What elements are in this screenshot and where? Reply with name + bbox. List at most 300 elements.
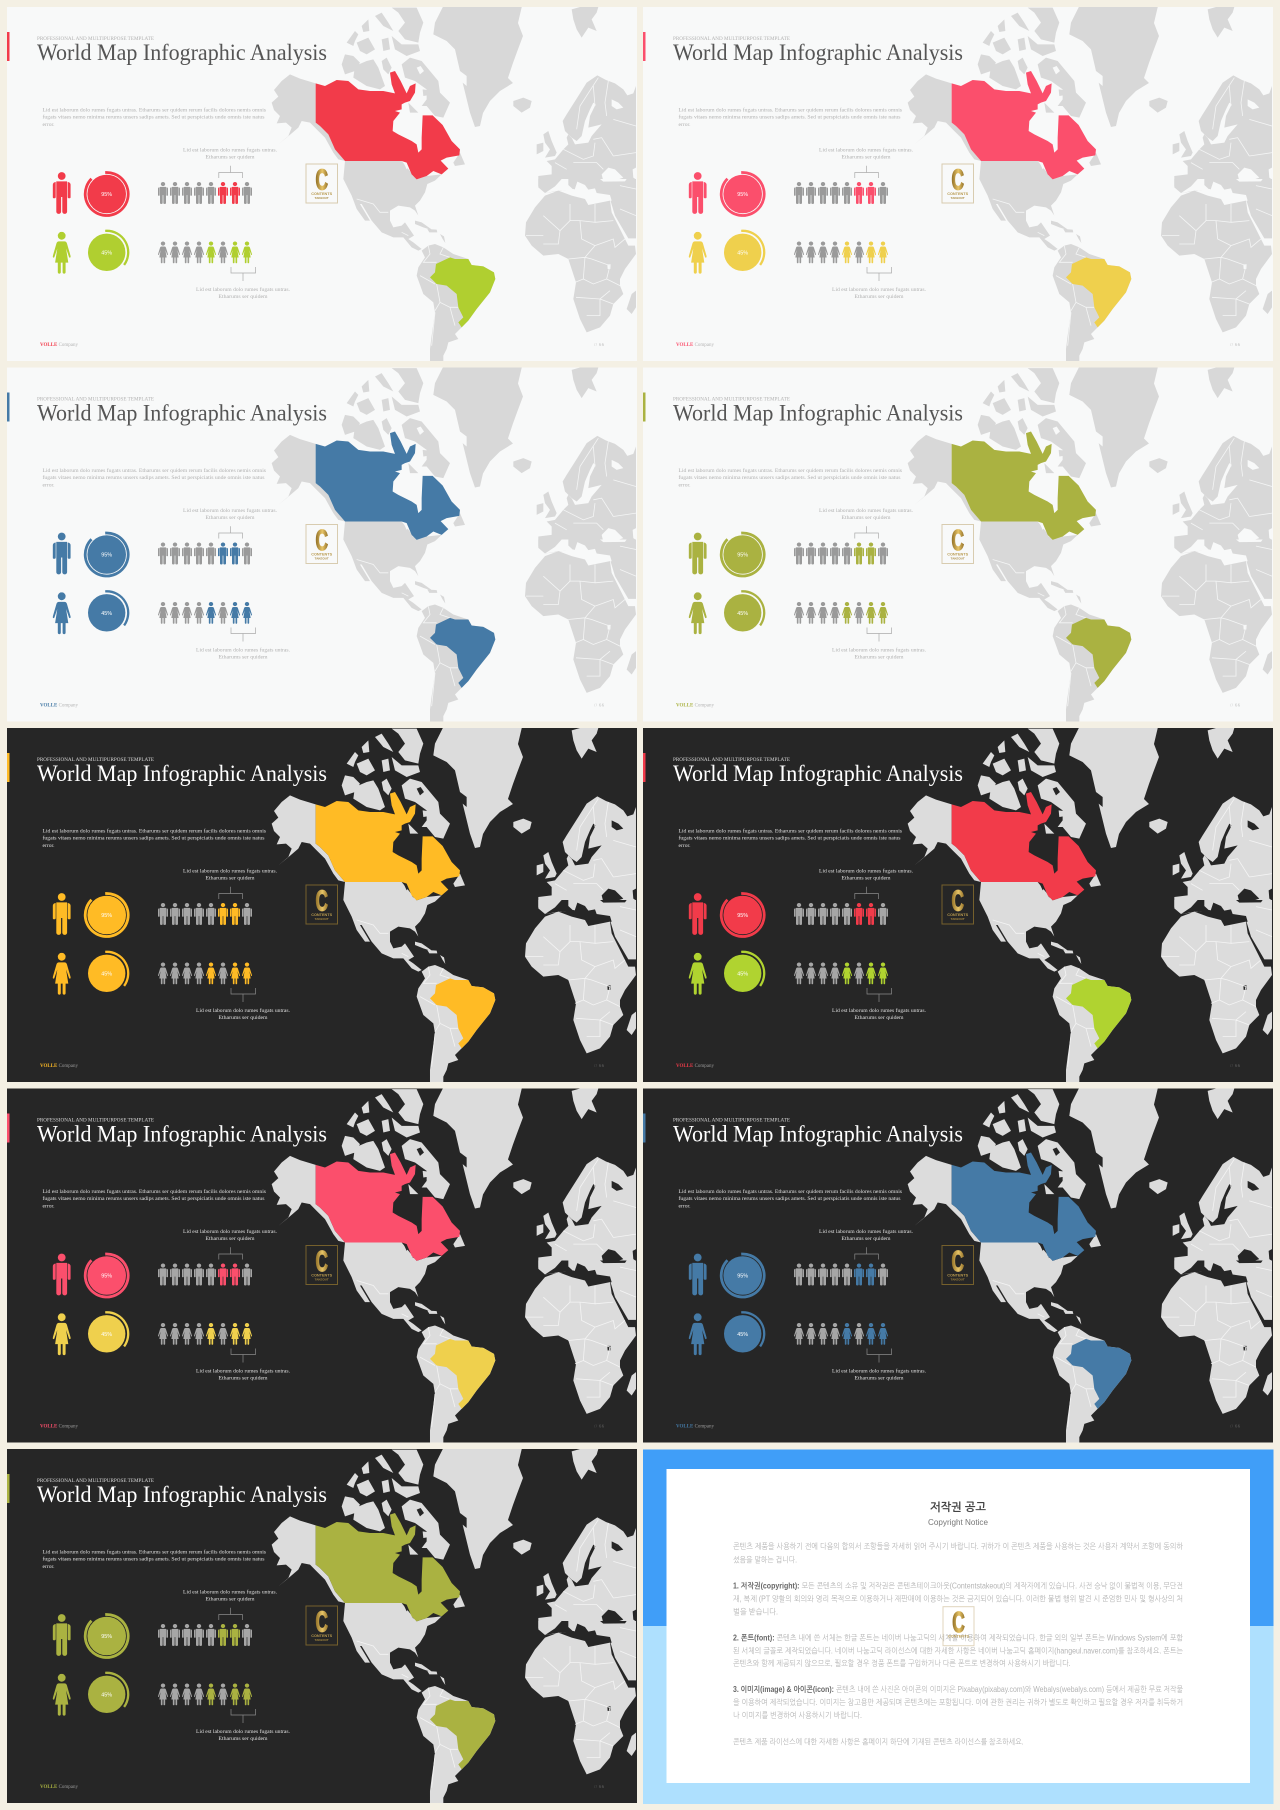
top callout text: Lid est laborum dolo rumes fugats untras. <box>819 509 913 514</box>
section 3: image and icon: 3. 이미지(image) & 아이콘(icon): 콘텐츠 내에 쓴 사진은 아이콘의 이미지은 Pixabay(pixabay.com)와 Webalys(webalys.com) 등에서 제공한 무료 저작물 <box>733 1685 1183 1694</box>
logo badge: CONTENTS <box>311 912 333 917</box>
title: World Map Infographic Analysis <box>673 400 963 426</box>
intro text: fugats vitaes nemo minima rerums unsers sadips amets. Sed ut perspiciatis unde omnis iste natus <box>42 837 265 842</box>
intro text: Lid est laborum dolo rumes fugats untras. Etharums ser quidem rerum facilis dolores nemis omnis <box>42 108 266 114</box>
intro paragraph: 셨음을 말하는 겁니다. <box>733 1556 797 1564</box>
footer brand: VOLLE Company <box>40 702 78 708</box>
male pictogram row <box>158 1264 252 1285</box>
panel: copyright notice <box>643 1450 1274 1804</box>
top callout text <box>183 870 277 882</box>
logo badge: CONTENTS <box>947 1272 969 1278</box>
copyright subheading: Copyright Notice <box>928 1518 989 1527</box>
icon: male figure <box>53 1254 71 1295</box>
section 2: font: 된 서체의 글꼴로 제작되었습니다. 네이버 나눔고딕 라이선스에 대한 자세한 사항은 네이버 나눔고딕 홈페이지(hangeul.naver.com)를 참조하세요. 폰트는 <box>733 1646 1183 1656</box>
logo badge: C <box>315 165 328 197</box>
icon: female figure <box>53 1674 71 1716</box>
eyebrow heading: PROFESSIONAL AND MULTIPURPOSE TEMPLATE <box>37 1479 154 1484</box>
donut: 45%: 45% <box>101 1332 112 1338</box>
intro paragraph <box>733 1542 1183 1564</box>
logo badge <box>942 1246 974 1284</box>
top bracket <box>219 887 242 899</box>
icon: female figure <box>689 953 707 995</box>
logo badge: TAKEOUT <box>315 917 329 921</box>
logo badge: C <box>951 1246 964 1278</box>
bottom callout text: Lid est laborum dolo rumes fugats untras. <box>196 1730 290 1735</box>
logo badge: TAKEOUT <box>951 557 965 561</box>
eyebrow heading: PROFESSIONAL AND MULTIPURPOSE TEMPLATE <box>37 1118 154 1124</box>
section 1: copyright: 벌을 받습니다. <box>733 1608 778 1616</box>
title: World Map Infographic Analysis <box>37 400 327 426</box>
intro text: fugats vitaes nemo minima rerums unsers sadips amets. Sed ut perspiciatis unde omnis iste natus <box>42 1558 265 1563</box>
intro text: error. <box>42 123 54 128</box>
logo badge: C <box>952 1607 965 1639</box>
donut: 95%: 95% <box>101 913 112 919</box>
donut: 95%: 95% <box>101 1634 112 1640</box>
intro text: error. <box>42 844 54 849</box>
female pictogram row <box>158 602 252 624</box>
bottom bracket <box>867 988 892 1002</box>
intro text: fugats vitaes nemo minima rerums unsers sadips amets. Sed ut perspiciatis unde omnis iste natus <box>678 116 901 121</box>
intro text: error. <box>678 1204 690 1209</box>
accent bar <box>643 1114 646 1142</box>
section 3: image and icon: 을 이용하여 제작되었습니다. 이미지는 참고용만 제공되며 콘텐츠에는 포함됩니다. 이에 관한 권리는 귀하가 별도로 확인하고 필요할 경우 저자를 취득하거 <box>733 1698 1183 1707</box>
top callout text: Lid est laborum dolo rumes fugats untras. <box>183 1230 277 1235</box>
world map with Canada and Brazil highlighted <box>272 1088 636 1444</box>
logo badge: CONTENTS <box>311 1633 333 1638</box>
top callout text: Lid est laborum dolo rumes fugats untras. <box>183 509 277 514</box>
donut: 95% <box>721 1254 764 1297</box>
world map with Canada and Brazil highlighted <box>908 366 1272 723</box>
top callout text: Etharums ser quidem <box>206 156 255 161</box>
donut: 45% <box>88 1312 128 1352</box>
logo badge: C <box>951 165 964 197</box>
eyebrow heading: PROFESSIONAL AND MULTIPURPOSE TEMPLATE <box>37 758 154 763</box>
logo badge: C <box>315 886 328 918</box>
icon: male figure <box>689 1254 707 1295</box>
bottom bracket <box>231 1709 256 1723</box>
donut: 95% <box>721 172 764 215</box>
donut: 95% <box>85 893 128 936</box>
top bracket <box>219 1608 242 1620</box>
intro text: fugats vitaes nemo minima rerums unsers sadips amets. Sed ut perspiciatis unde omnis iste natus <box>42 476 265 481</box>
bottom bracket <box>231 628 256 642</box>
accent bar <box>7 392 10 422</box>
logo badge <box>306 1606 338 1645</box>
logo badge: CONTENTS <box>947 191 969 196</box>
section 2: font: 2. 폰트(font): 콘텐츠 내에 쓴 서체는 한글 폰트는 네이버 나눔고딕의 서체를 이용하여 제작되었습니다. 한글 외의 일부 폰트는 Windows System에 포함 <box>733 1634 1183 1642</box>
page number: // 66 <box>594 1784 605 1789</box>
bottom callout text: Lid est laborum dolo rumes fugats untras. <box>832 1009 926 1014</box>
top callout text: Lid est laborum dolo rumes fugats untras. <box>819 148 913 154</box>
world map with Canada and Brazil highlighted <box>272 366 636 723</box>
top callout text <box>819 509 913 521</box>
bottom callout text <box>196 288 290 300</box>
male pictogram row <box>794 543 888 564</box>
bottom callout text <box>196 1009 290 1021</box>
eyebrow heading: PROFESSIONAL AND MULTIPURPOSE TEMPLATE <box>37 398 154 402</box>
logo badge <box>943 1607 974 1646</box>
top bracket <box>855 166 878 178</box>
bottom callout text <box>832 288 926 300</box>
logo badge <box>942 885 974 924</box>
icon: male figure <box>689 172 707 214</box>
bottom callout text <box>196 1730 290 1742</box>
intro text: Lid est laborum dolo rumes fugats untras. Etharums ser quidem rerum facilis dolores nemis omnis <box>42 469 266 474</box>
intro text: fugats vitaes nemo minima rerums unsers sadips amets. Sed ut perspiciatis unde omnis iste natus <box>42 116 265 121</box>
male pictogram row <box>794 903 888 925</box>
intro text: Lid est laborum dolo rumes fugats untras. Etharums ser quidem rerum facilis dolores nemis omnis <box>678 469 902 474</box>
section 3: image and icon: 나 이미지를 변경하여 사용하시기 바랍니다. <box>733 1711 862 1720</box>
donut: 45% <box>724 1312 764 1352</box>
donut: 95% <box>85 1614 128 1657</box>
male pictogram row <box>158 903 252 925</box>
female pictogram row <box>158 963 252 984</box>
bottom callout text: Lid est laborum dolo rumes fugats untras. <box>196 288 290 293</box>
bottom callout text <box>832 649 926 661</box>
top callout text <box>819 1230 913 1242</box>
donut: 95%: 95% <box>101 1274 112 1280</box>
bottom callout text: Etharums ser quidem <box>854 656 904 661</box>
panel: light slide, olive <box>643 366 1273 723</box>
title: World Map Infographic Analysis <box>37 761 327 786</box>
female pictogram row <box>158 1323 252 1345</box>
female pictogram row <box>158 1684 252 1705</box>
bottom callout text: Etharums ser quidem <box>218 295 268 300</box>
top callout text: Lid est laborum dolo rumes fugats untras. <box>819 1230 913 1235</box>
intro text <box>42 469 266 488</box>
top callout text: Lid est laborum dolo rumes fugats untras. <box>183 870 277 874</box>
donut: 95% <box>85 1254 128 1297</box>
page number: // 66 <box>1230 1063 1241 1068</box>
bottom bracket <box>231 267 256 281</box>
top bracket <box>219 526 242 538</box>
bottom callout text: Lid est laborum dolo rumes fugats untras. <box>196 1370 290 1375</box>
top bracket <box>855 887 878 899</box>
logo badge <box>306 164 338 203</box>
page number: // 66 <box>594 342 605 347</box>
icon: male figure <box>689 893 707 935</box>
icon: female figure <box>689 232 707 274</box>
donut: 45%: 45% <box>737 611 748 617</box>
icon: male figure <box>53 172 71 214</box>
top callout text: Etharums ser quidem <box>842 1237 891 1242</box>
bottom callout text: Lid est laborum dolo rumes fugats untras. <box>196 649 290 654</box>
bottom callout text: Etharums ser quidem <box>854 1377 904 1382</box>
title: World Map Infographic Analysis <box>673 761 963 786</box>
eyebrow heading: PROFESSIONAL AND MULTIPURPOSE TEMPLATE <box>673 758 790 763</box>
female pictogram row <box>794 602 888 624</box>
section 1: copyright: 1. 저작권(copyright): 모든 콘텐츠의 소유 및 저작권은 콘텐츠테이크아웃(Contentstakeout)의 제작자에게 있습니다. 사전 승낙 없이 불법적 이용, 무단전 <box>733 1582 1183 1590</box>
section 3: image and icon <box>733 1685 1183 1720</box>
world map with Canada and Brazil highlighted <box>272 727 636 1083</box>
top callout text: Etharums ser quidem <box>842 516 891 521</box>
icon: male figure <box>53 1614 71 1656</box>
top bracket <box>219 166 242 178</box>
top callout text <box>183 1230 277 1242</box>
accent bar <box>643 753 646 782</box>
donut: 45%: 45% <box>737 1332 748 1338</box>
top callout text: Etharums ser quidem <box>206 516 255 521</box>
logo badge: TAKEOUT <box>951 1278 965 1282</box>
top callout text <box>819 870 913 882</box>
top callout text: Etharums ser quidem <box>206 877 255 882</box>
footer brand: VOLLE Company <box>676 702 714 708</box>
accent bar <box>643 392 646 422</box>
panel: dark slide, amber <box>7 727 637 1083</box>
footer brand: VOLLE Company <box>40 342 78 348</box>
donut: 95%: 95% <box>101 552 112 558</box>
bottom callout text <box>196 649 290 661</box>
logo badge: TAKEOUT <box>315 196 329 200</box>
donut: 45% <box>88 591 128 632</box>
title: World Map Infographic Analysis <box>37 1122 327 1146</box>
donut: 95% <box>85 172 128 215</box>
logo badge: C <box>951 525 964 557</box>
icon: male figure <box>689 533 707 574</box>
accent bar <box>7 1474 10 1503</box>
logo badge <box>306 885 338 924</box>
icon: female figure <box>53 592 71 634</box>
intro text <box>678 469 902 488</box>
top bracket <box>219 1247 242 1260</box>
female pictogram row <box>794 242 888 263</box>
logo badge: C <box>315 1246 328 1278</box>
intro text: Lid est laborum dolo rumes fugats untras. Etharums ser quidem rerum facilis dolores nemis omnis <box>42 830 266 834</box>
accent bar <box>7 753 10 782</box>
title: World Map Infographic Analysis <box>37 40 327 65</box>
donut: 95%: 95% <box>737 192 748 198</box>
bottom bracket <box>231 988 256 1002</box>
panel: dark slide, blue <box>643 1088 1273 1444</box>
eyebrow heading: PROFESSIONAL AND MULTIPURPOSE TEMPLATE <box>673 1118 790 1124</box>
panel: light slide, pink and yellow <box>643 6 1273 362</box>
bottom callout text <box>832 1370 926 1382</box>
intro text: error. <box>678 483 690 488</box>
logo badge: C <box>315 525 328 557</box>
intro paragraph: 콘텐츠 제품을 사용하기 전에 다음의 합의서 조항들을 자세히 읽어 주시기 바랍니다. 귀하가 이 콘텐츠 제품을 사용하는 것은 사용자 계약서 조항에 동의하 <box>733 1542 1183 1551</box>
logo badge: CONTENTS <box>947 912 969 917</box>
logo badge: CONTENTS <box>311 552 333 556</box>
top bracket <box>855 526 878 538</box>
female pictogram row <box>158 242 252 263</box>
bottom callout text: Lid est laborum dolo rumes fugats untras. <box>196 1009 290 1014</box>
bottom bracket <box>231 1348 256 1362</box>
logo badge: C <box>951 886 964 918</box>
intro text: error. <box>678 123 690 128</box>
donut: 45% <box>88 1673 128 1713</box>
donut: 45%: 45% <box>101 1692 112 1698</box>
accent bar <box>7 1114 10 1142</box>
bottom callout text: Etharums ser quidem <box>218 656 268 661</box>
panel: light slide, red and green <box>7 6 637 362</box>
male pictogram row <box>158 1624 252 1646</box>
accent bar <box>643 32 646 61</box>
donut: 95%: 95% <box>737 913 748 919</box>
female pictogram row <box>794 963 888 984</box>
page number: // 66 <box>594 702 605 708</box>
bottom callout text <box>196 1370 290 1382</box>
eyebrow heading: PROFESSIONAL AND MULTIPURPOSE TEMPLATE <box>673 37 790 42</box>
intro text <box>678 830 902 849</box>
male pictogram row <box>158 543 252 564</box>
intro text <box>42 1550 266 1570</box>
icon: female figure <box>53 953 71 995</box>
logo badge: C <box>315 1607 328 1639</box>
section 1: copyright <box>733 1582 1183 1616</box>
male pictogram row <box>158 182 252 204</box>
bottom callout text: Etharums ser quidem <box>218 1016 268 1021</box>
intro text <box>42 108 266 128</box>
donut: 95% <box>721 533 764 576</box>
title: World Map Infographic Analysis <box>673 40 963 65</box>
icon: female figure <box>689 1313 707 1355</box>
eyebrow heading: PROFESSIONAL AND MULTIPURPOSE TEMPLATE <box>37 37 154 42</box>
intro text <box>678 1190 902 1209</box>
world map with Canada and Brazil highlighted <box>272 1448 636 1804</box>
intro text: error. <box>42 1204 54 1209</box>
bottom callout text: Lid est laborum dolo rumes fugats untras. <box>832 1370 926 1375</box>
accent bar <box>7 32 10 61</box>
logo badge: TAKEOUT <box>951 196 965 200</box>
donut: 45% <box>724 591 764 632</box>
copyright heading: 저작권 공고 <box>930 1501 986 1514</box>
donut: 45% <box>724 231 764 271</box>
footer brand: VOLLE Company <box>40 1784 78 1790</box>
panel: light slide, blue <box>7 366 637 723</box>
male pictogram row <box>794 1264 888 1285</box>
donut: 45% <box>88 231 128 271</box>
logo badge <box>942 524 974 564</box>
donut: 45% <box>724 952 764 992</box>
intro text: Lid est laborum dolo rumes fugats untras. Etharums ser quidem rerum facilis dolores nemis omnis <box>42 1550 266 1556</box>
footer brand: VOLLE Company <box>676 1424 714 1430</box>
page number: // 66 <box>594 1063 605 1068</box>
intro text: Lid est laborum dolo rumes fugats untras. Etharums ser quidem rerum facilis dolores nemis omnis <box>42 1190 266 1195</box>
world map with Canada and Brazil highlighted <box>908 6 1272 362</box>
page number: // 66 <box>1230 1424 1241 1428</box>
intro text: fugats vitaes nemo minima rerums unsers sadips amets. Sed ut perspiciatis unde omnis iste natus <box>42 1197 265 1202</box>
bottom bracket <box>867 1348 892 1362</box>
icon: male figure <box>53 533 71 574</box>
logo badge: TAKEOUT <box>315 1278 329 1282</box>
donut: 95% <box>721 893 764 936</box>
page number: // 66 <box>1230 342 1241 347</box>
logo badge: TAKEOUT <box>315 557 329 561</box>
bottom callout text: Lid est laborum dolo rumes fugats untras. <box>832 288 926 293</box>
top callout text <box>183 509 277 521</box>
footer brand: VOLLE Company <box>676 1063 714 1069</box>
title: World Map Infographic Analysis <box>673 1122 963 1146</box>
intro text <box>678 108 902 128</box>
female pictogram row <box>794 1323 888 1345</box>
donut: 45%: 45% <box>101 250 112 256</box>
top callout text: Etharums ser quidem <box>206 1598 255 1603</box>
intro text <box>42 830 266 849</box>
top callout text <box>183 148 277 161</box>
icon: female figure <box>689 592 707 634</box>
logo badge: CONTENTS <box>311 1272 333 1278</box>
top callout text: Etharums ser quidem <box>842 877 891 882</box>
logo badge: CONTENTS <box>311 191 333 196</box>
eyebrow heading: PROFESSIONAL AND MULTIPURPOSE TEMPLATE <box>673 398 790 402</box>
page number: // 66 <box>1230 702 1241 708</box>
male pictogram row <box>794 182 888 204</box>
top callout text <box>183 1590 277 1603</box>
logo badge: CONTENTS <box>948 1634 969 1638</box>
logo badge: TAKEOUT <box>951 917 965 921</box>
intro text: error. <box>42 1565 54 1570</box>
footer brand: VOLLE Company <box>40 1424 78 1430</box>
top callout text: Etharums ser quidem <box>206 1237 255 1242</box>
intro text: Lid est laborum dolo rumes fugats untras. Etharums ser quidem rerum facilis dolores nemis omnis <box>678 108 902 114</box>
bottom callout text: Etharums ser quidem <box>854 1016 904 1021</box>
icon: female figure <box>53 1313 71 1355</box>
donut: 95% <box>85 533 128 576</box>
donut: 45%: 45% <box>101 611 112 617</box>
world map with Canada and Brazil highlighted <box>908 1088 1272 1444</box>
section 1: copyright: 재, 복제 (PT 양할의 회의와 영리 목적으로 이용하거나 재판매에 이용하는 것은 금지되어 있습니다. 이러한 불법 행위 발견 시 준엄한 민사 및 형사상의 처 <box>733 1594 1183 1604</box>
panel: dark slide, red and green <box>643 727 1273 1083</box>
footer brand: VOLLE Company <box>40 1063 78 1069</box>
world map with Canada and Brazil highlighted <box>908 727 1272 1083</box>
bottom callout text: Etharums ser quidem <box>218 1737 268 1742</box>
page number: // 66 <box>594 1424 605 1428</box>
footer brand: VOLLE Company <box>676 342 714 348</box>
bottom bracket <box>867 628 892 642</box>
bottom bracket <box>867 267 892 281</box>
intro text: fugats vitaes nemo minima rerums unsers sadips amets. Sed ut perspiciatis unde omnis iste natus <box>678 476 901 481</box>
license note: 콘텐츠 제품 라이선스에 대한 자세한 사항은 홈페이지 하단에 기재된 콘텐츠 라이선스를 참조하세요. <box>733 1738 1024 1746</box>
donut: 95%: 95% <box>737 552 748 558</box>
top callout text: Lid est laborum dolo rumes fugats untras. <box>183 148 277 154</box>
intro text: Lid est laborum dolo rumes fugats untras. Etharums ser quidem rerum facilis dolores nemis omnis <box>678 830 902 834</box>
world map with Canada and Brazil highlighted <box>272 6 636 362</box>
bottom callout text: Lid est laborum dolo rumes fugats untras. <box>832 649 926 654</box>
section 2: font <box>733 1634 1183 1668</box>
bottom callout text: Etharums ser quidem <box>218 1377 268 1382</box>
panel: dark slide, pink and yellow <box>7 1088 637 1444</box>
donut: 45%: 45% <box>101 971 112 977</box>
logo badge <box>306 524 338 564</box>
donut: 45%: 45% <box>737 250 748 256</box>
top bracket <box>855 1247 878 1260</box>
title: World Map Infographic Analysis <box>37 1482 327 1507</box>
logo badge <box>306 1246 338 1284</box>
top callout text <box>819 148 913 161</box>
bottom callout text: Etharums ser quidem <box>854 295 904 300</box>
top callout text: Lid est laborum dolo rumes fugats untras. <box>183 1590 277 1596</box>
donut: 95%: 95% <box>737 1274 748 1280</box>
intro text: fugats vitaes nemo minima rerums unsers sadips amets. Sed ut perspiciatis unde omnis iste natus <box>678 1197 901 1202</box>
donut: 95%: 95% <box>101 192 112 198</box>
bottom callout text <box>832 1009 926 1021</box>
panel: dark slide, olive <box>7 1448 637 1804</box>
intro text: Lid est laborum dolo rumes fugats untras. Etharums ser quidem rerum facilis dolores nemis omnis <box>678 1190 902 1195</box>
logo badge: CONTENTS <box>947 552 969 556</box>
intro text: error. <box>678 844 690 849</box>
intro text <box>42 1190 266 1209</box>
icon: female figure <box>53 232 71 274</box>
section 2: font: 콘텐츠와 함께 제공되지 않으므로, 필요할 경우 정품 폰트를 구입하거나 다른 폰트로 변경하여 사용하시기 바랍니다. <box>733 1659 1071 1668</box>
icon: male figure <box>53 893 71 935</box>
top callout text: Etharums ser quidem <box>842 156 891 161</box>
donut: 45%: 45% <box>737 971 748 977</box>
logo badge: TAKEOUT <box>315 1638 329 1642</box>
top callout text: Lid est laborum dolo rumes fugats untras. <box>819 870 913 874</box>
donut: 45% <box>88 952 128 992</box>
logo badge <box>942 164 974 203</box>
intro text: fugats vitaes nemo minima rerums unsers sadips amets. Sed ut perspiciatis unde omnis iste natus <box>678 837 901 842</box>
